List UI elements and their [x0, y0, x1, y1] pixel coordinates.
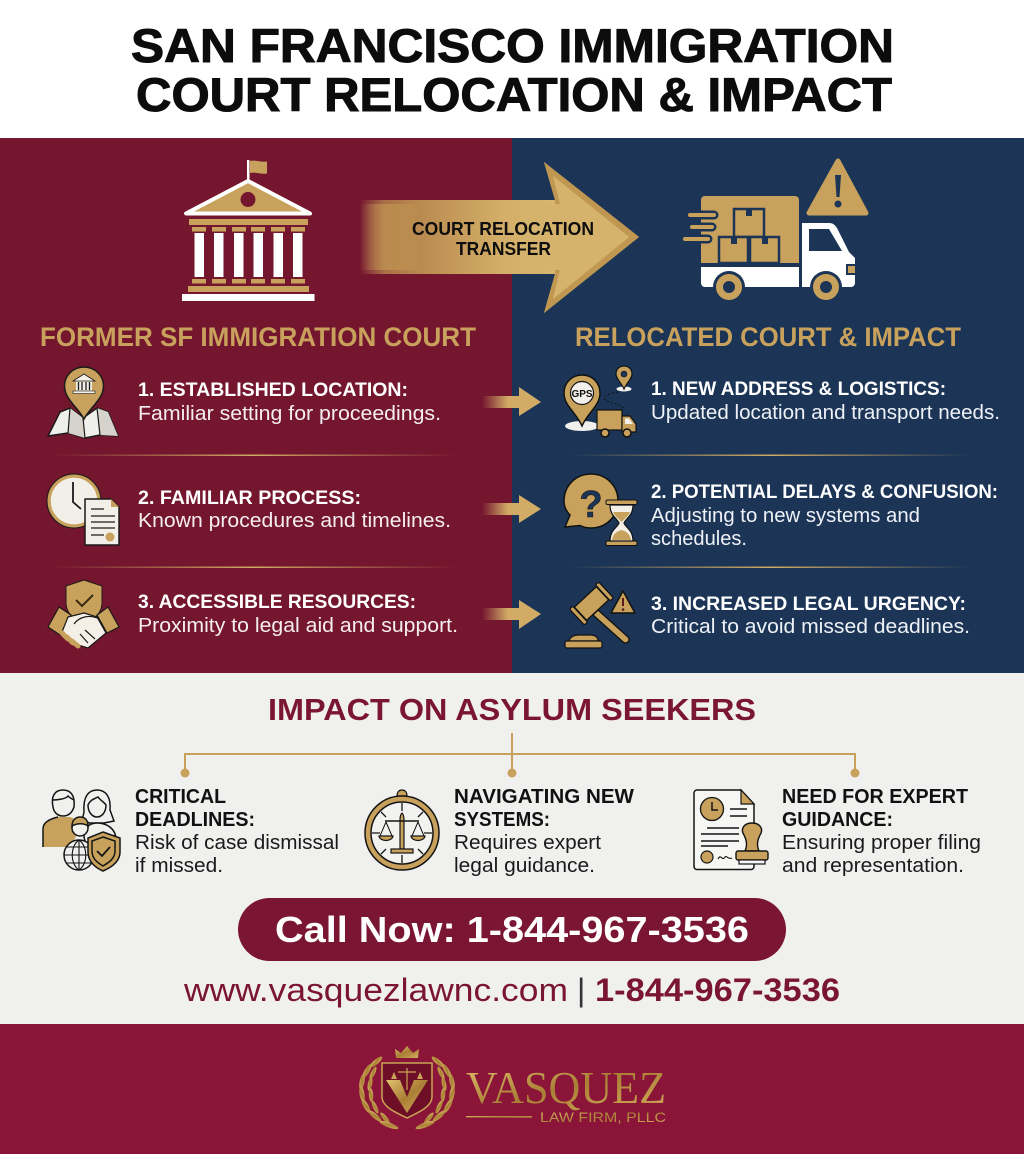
button: call now: Call Now: 1-844-967-3536	[275, 909, 749, 950]
logo wordmark: LAW FIRM, PLLC	[540, 1109, 666, 1125]
icon: map pin	[48, 367, 118, 438]
text: established location: Familiar setting for proceedings.	[138, 403, 441, 425]
text: potential delays: schedules.	[651, 528, 747, 550]
text: navigating new systems	[454, 786, 634, 877]
button: call now	[238, 898, 786, 961]
icon: question bubble and hourglass	[564, 474, 637, 546]
icon: family with globe and shield	[43, 790, 120, 871]
logo wreath left	[358, 1055, 399, 1131]
arrow: court relocation transfer	[360, 162, 639, 313]
text: increased urgency	[651, 593, 970, 638]
text: critical deadlines: Risk of case dismissal	[135, 832, 339, 854]
text: established location	[138, 379, 441, 425]
item: increased urgency	[565, 582, 970, 648]
footer	[0, 1024, 1024, 1154]
text: need for expert guidance: and representation.	[782, 855, 964, 877]
text: potential delays: Adjusting to new systems and	[651, 505, 920, 527]
contact line: |	[577, 972, 585, 1008]
icon: gavel and warning	[565, 582, 635, 648]
text: critical deadlines	[135, 786, 339, 877]
text: familiar process	[138, 487, 451, 532]
text: potential delays: 2. POTENTIAL DELAYS & CONFUSION:	[651, 481, 998, 503]
icon: shield and handshake	[48, 580, 119, 648]
logo crown	[395, 1046, 419, 1058]
contact line: 1-844-967-3536	[595, 972, 840, 1008]
item: potential delays	[564, 474, 998, 550]
panel: former court	[0, 138, 512, 673]
column: navigating new systems	[365, 786, 634, 877]
item: accessible resources	[48, 580, 458, 648]
text: need for expert guidance: NEED FOR EXPERT	[782, 786, 968, 808]
icon: GPS pin and truck: GPS	[571, 389, 593, 400]
arrow: row 1	[482, 387, 541, 416]
logo wordmark: VASQUEZ	[466, 1062, 666, 1113]
contact line: www.vasquezlawnc.com	[183, 972, 568, 1008]
text: need for expert guidance	[782, 786, 981, 877]
text: familiar process: Known procedures and timelines.	[138, 510, 451, 532]
arrow: court relocation transfer: TRANSFER	[456, 238, 551, 259]
title: COURT RELOCATION & IMPACT	[136, 68, 892, 121]
text: new address	[651, 378, 1000, 424]
text: potential delays	[651, 481, 998, 550]
heading: former court: FORMER SF IMMIGRATION COURT	[40, 322, 476, 352]
text: navigating new systems: NAVIGATING NEW	[454, 786, 634, 808]
column: need for expert guidance	[694, 786, 981, 877]
title	[131, 19, 894, 121]
text: need for expert guidance: GUIDANCE:	[782, 809, 893, 831]
text: increased urgency: Critical to avoid missed deadlines.	[651, 616, 970, 638]
text: critical deadlines: if missed.	[135, 855, 223, 877]
arrow: row 3	[482, 600, 541, 629]
text: critical deadlines: CRITICAL	[135, 786, 226, 808]
text: established location: 1. ESTABLISHED LOCATION:	[138, 379, 408, 401]
arrow: court relocation transfer: COURT RELOCATION	[412, 218, 594, 239]
text: need for expert guidance: Ensuring proper filing	[782, 832, 981, 854]
text: critical deadlines: DEADLINES:	[135, 809, 255, 831]
text: navigating new systems: SYSTEMS:	[454, 809, 550, 831]
icon: clock and document	[47, 474, 119, 545]
logo: Vasquez Law Firm	[358, 1046, 666, 1131]
icon: document with stamp	[694, 790, 768, 870]
connector tree	[180, 733, 860, 778]
text: new address: Updated location and transport needs.	[651, 402, 1000, 424]
contact line	[183, 972, 840, 1008]
item: new address	[564, 366, 1000, 437]
text: accessible resources: 3. ACCESSIBLE RESOURCES:	[138, 591, 416, 613]
title: SAN FRANCISCO IMMIGRATION	[131, 19, 894, 72]
heading: relocated court: RELOCATED COURT & IMPACT	[575, 322, 961, 352]
text: navigating new systems: Requires expert	[454, 832, 601, 854]
panel: relocated court	[512, 138, 1024, 673]
logo wreath right	[415, 1055, 456, 1131]
text: new address: 1. NEW ADDRESS & LOGISTICS:	[651, 378, 946, 400]
icon: courthouse	[182, 160, 314, 301]
icon: GPS pin and truck	[564, 366, 636, 437]
item: familiar process	[47, 474, 451, 545]
column: critical deadlines	[43, 786, 339, 877]
text: familiar process: 2. FAMILIAR PROCESS:	[138, 487, 361, 509]
icon: question bubble and hourglass: ?	[579, 484, 603, 526]
logo shield	[382, 1063, 432, 1118]
heading: impact: IMPACT ON ASYLUM SEEKERS	[268, 692, 756, 727]
text: increased urgency: 3. INCREASED LEGAL URGENCY:	[651, 593, 966, 615]
icon: compass with scales	[365, 790, 439, 870]
item: established location	[48, 367, 441, 438]
icon: moving truck with warning	[685, 161, 866, 303]
panel: impact on asylum seekers	[0, 673, 1024, 1024]
arrow: row 2	[482, 495, 541, 523]
text: accessible resources	[138, 591, 458, 637]
text: navigating new systems: legal guidance.	[454, 855, 595, 877]
text: accessible resources: Proximity to legal aid and support.	[138, 615, 458, 637]
